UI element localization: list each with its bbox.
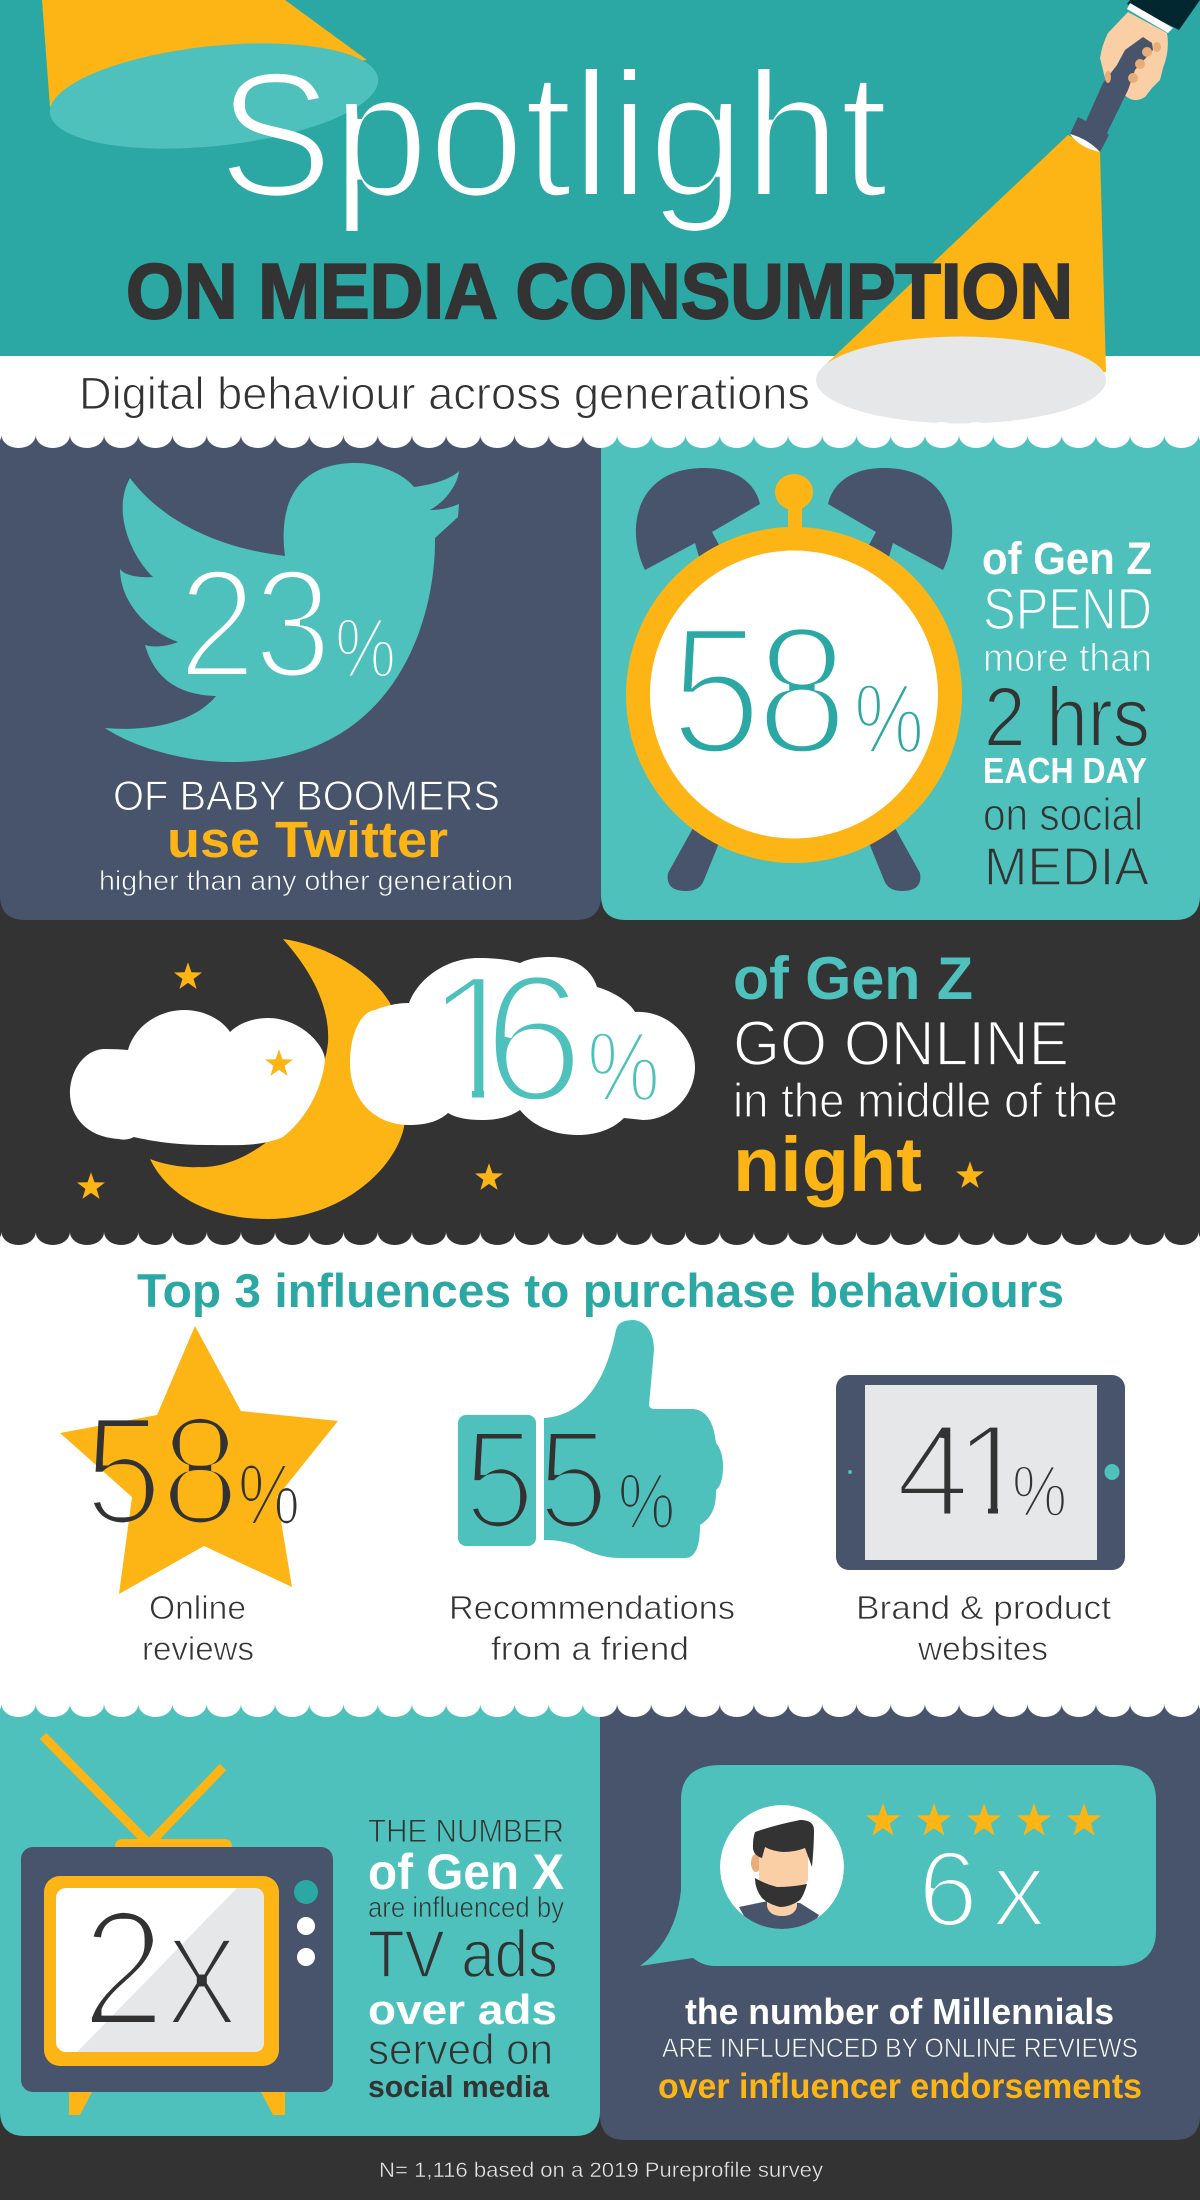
text: gen x tv ads column: TV ads [368,1917,558,1992]
panel: alarm clock gen z [601,435,1200,920]
label: websites [917,1630,1048,1667]
item: online reviews [60,1326,338,1667]
stat: 16%: 1 [425,936,526,1140]
text: gen x tv ads column: served on [368,2026,553,2074]
panel: millennials 6x [600,1704,1200,2140]
text: gen x tv ads column [368,1813,564,2104]
label: from a friend [491,1630,689,1667]
text: go online in the middle of the night [733,945,1118,1208]
text: gen z spend column: of Gen Z [982,533,1152,584]
header background [0,0,1200,356]
title: Spotlight: Spotlight [218,35,888,234]
stat: 55% [464,1402,675,1558]
callout: speech bubble [640,1765,1156,1966]
text: gen z spend column: more than [983,637,1152,680]
text: go online in the middle of the night: night [733,1122,922,1208]
text: gen x tv ads column: THE NUMBER [368,1813,564,1849]
text: gen x tv ads column: over ads [368,1986,557,2033]
text: gen x tv ads column: of Gen X [368,1844,564,1900]
text: millennials: over influencer endorsements [658,2067,1142,2106]
icon: five stars [866,1803,1101,1836]
text: gen z spend column: 2 hrs [984,670,1150,764]
text: gen z spend column: EACH DAY [983,750,1147,791]
panel: twitter baby boomers [0,435,601,920]
label [449,1589,735,1667]
icon: big star [60,1326,338,1594]
stat: 6x: 6x [918,1828,1046,1949]
icon: hand holding flashlight with beam [816,0,1200,424]
text: millennials: the number of Millennials [685,1991,1114,2032]
text: use Twitter: use Twitter [167,811,448,868]
text: of baby boomers: OF BABY BOOMERS [113,772,500,819]
panel: night gen z [0,920,1200,1232]
stat: 23%: % [335,601,396,695]
stat: 58%: % [854,663,924,774]
footer source note: N= 1,116 based on a 2019 Pureprofile survey [379,2159,824,2182]
text: go online in the middle of the night: GO ONLINE [733,1009,1069,1079]
icon: twitter bird [105,463,459,762]
icon: crescent moon [150,939,407,1219]
stat: 58% [670,588,924,792]
stat: 41%: 4 [896,1397,969,1544]
stat: 16%: % [587,1011,660,1122]
text: gen z spend column: MEDIA [984,837,1149,897]
icon: left spotlight [42,0,383,163]
icon: avatar [720,1805,844,1929]
text: millennials: ARE INFLUENCED BY ONLINE REVIEWS [662,2033,1138,2063]
label [142,1589,254,1667]
dark band behind rounded panels [0,880,1200,1232]
title: on media consumption: ON MEDIA CONSUMPTION [126,247,1073,335]
stat: 55%: % [618,1457,675,1545]
stat: 58%: 58 [670,588,848,792]
stat: 58%: 58 [84,1385,239,1558]
text: higher than any other generation: higher than any other generation [99,865,513,896]
text: gen z spend column: SPEND [983,577,1152,642]
stat: 41%: % [1012,1452,1067,1532]
stat: 16% [425,936,660,1140]
label: reviews [142,1630,254,1667]
stat: 41%: 1 [955,1397,1028,1544]
label: Brand & product [856,1589,1111,1626]
text: gen x tv ads column: are influenced by [368,1892,564,1924]
icon: right cloud [350,957,695,1135]
icon: alarm clock [626,468,962,891]
text: gen z spend column [982,533,1152,897]
text: go online in the middle of the night: of Gen Z [733,945,973,1012]
label: Online [149,1589,246,1626]
stat: 55%: 55 [464,1402,608,1558]
icon: left cloud [70,1010,325,1145]
stat: 23%: 23 [178,538,332,711]
panel: tv ads gen x [0,1704,600,2136]
item: recommendations [449,1320,735,1667]
stat: 41% [896,1397,1067,1544]
icon: television [21,1736,333,2115]
text: millennials [658,1991,1142,2106]
subtitle: Digital behaviour across generations [79,368,810,419]
text: gen x tv ads column: social media [368,2069,550,2104]
text: go online in the middle of the night: in the middle of the [733,1075,1118,1128]
label: Recommendations [449,1589,735,1626]
text: gen z spend column: on social [983,789,1143,840]
icon: thumbs up [458,1320,723,1558]
icon: tablet [836,1375,1125,1570]
label [856,1589,1111,1667]
stat: 16%: 6 [483,936,584,1140]
stat: 2x: 2x [82,1877,239,2061]
stat: 58%: % [238,1448,300,1543]
item: brand websites [836,1375,1125,1667]
icon: stars [77,962,984,1199]
heading: top 3 influences: Top 3 influences to purchase behaviours [137,1264,1064,1317]
